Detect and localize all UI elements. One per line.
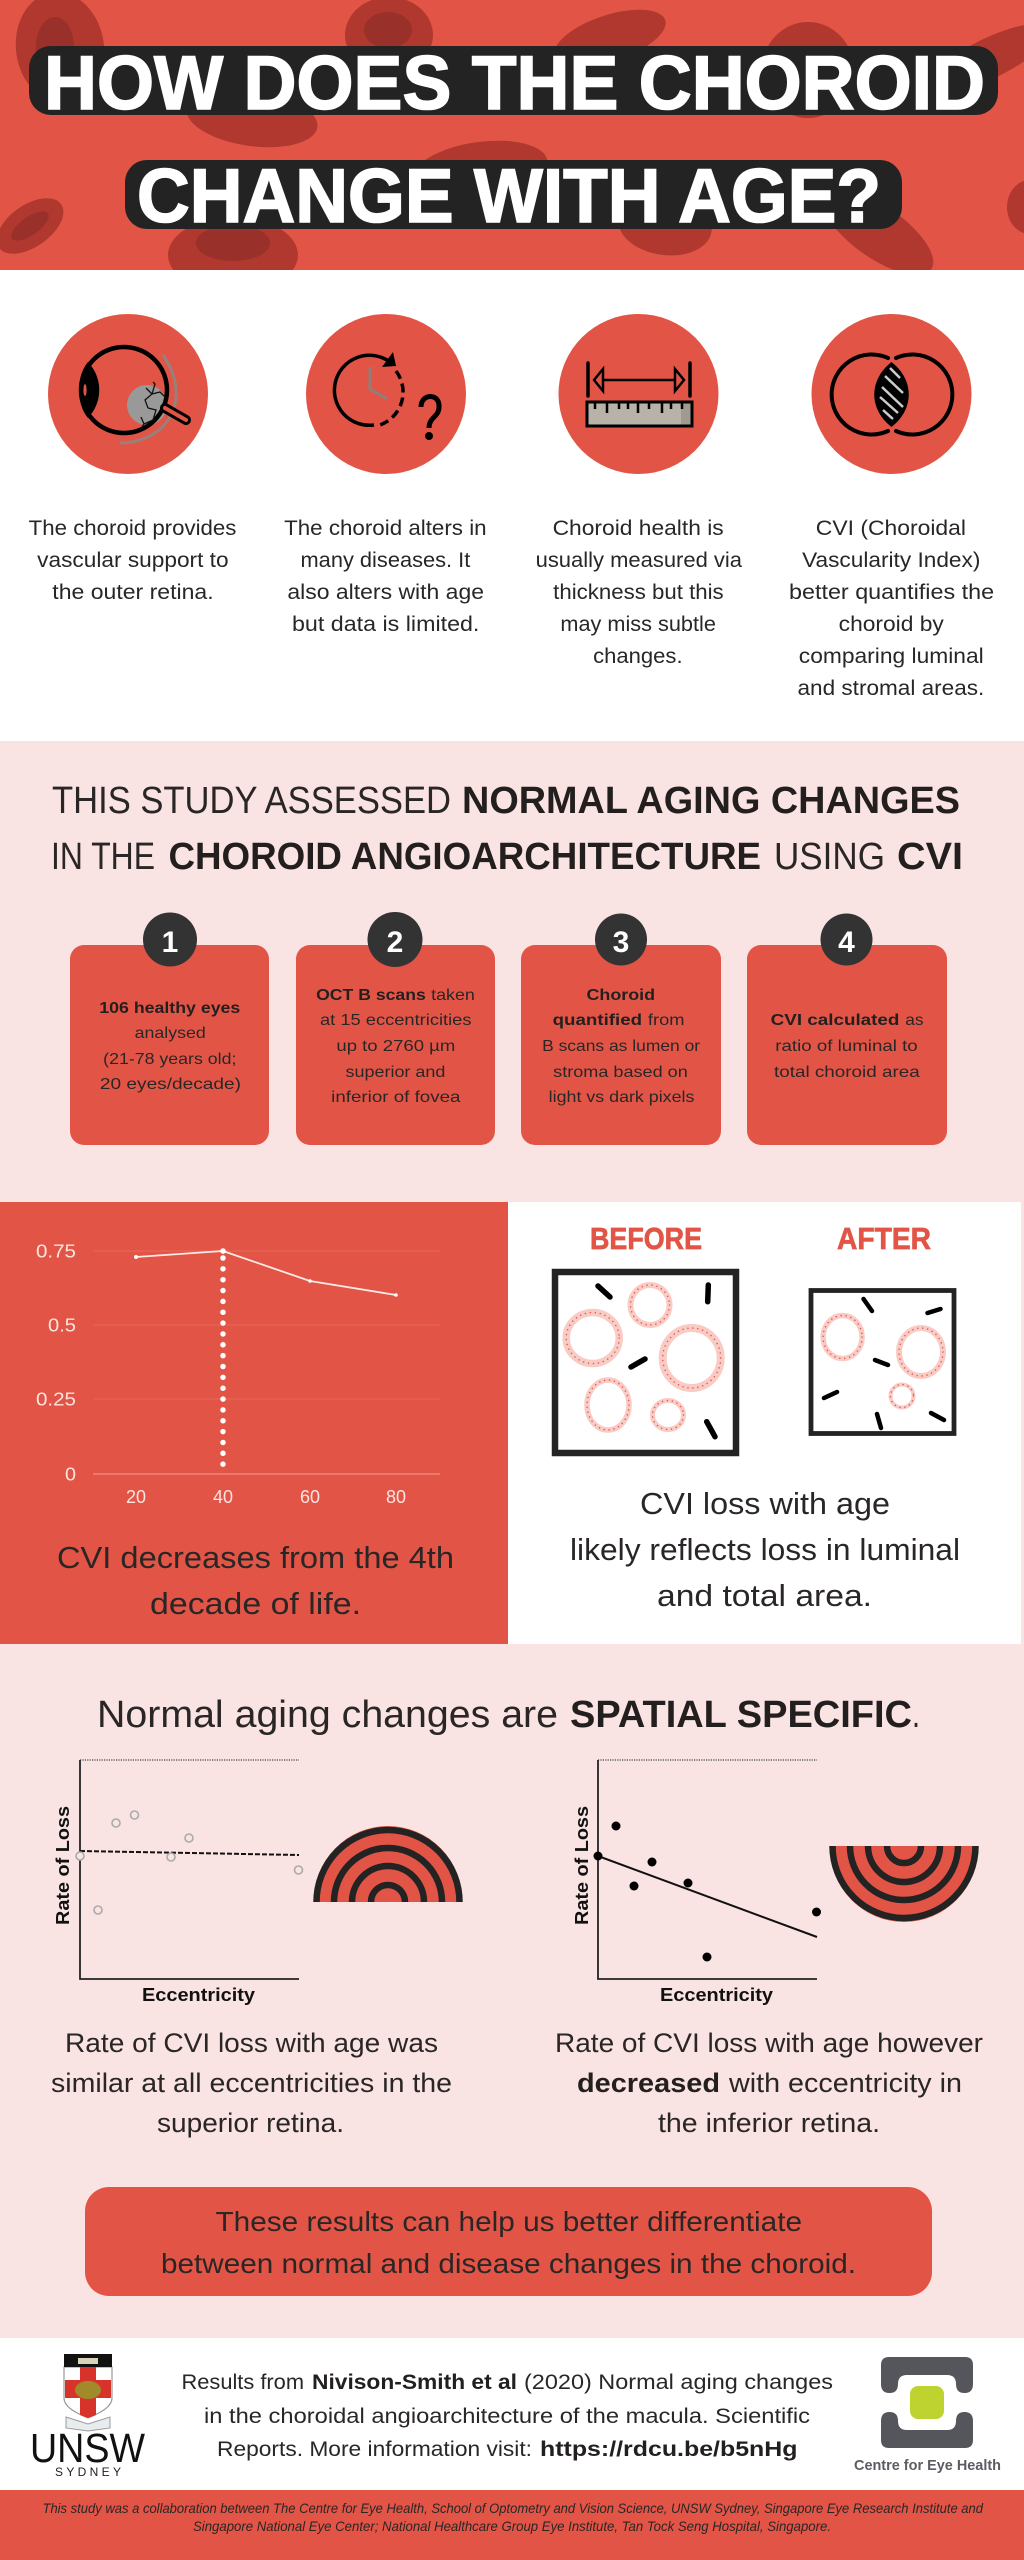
text: CVI loss reflects: and total area.	[657, 1578, 872, 1613]
text: citation: Nivison-Smith et al	[312, 2371, 517, 2394]
heading: study assessed: THIS STUDY ASSESSED	[52, 780, 451, 822]
text: inferior retina finding: decreased	[577, 2068, 720, 2098]
text: thickness measure: thickness but this	[553, 581, 724, 604]
text: thickness measure: changes.	[593, 645, 683, 668]
text: superior retina finding: similar at all eccentricities in the	[51, 2068, 452, 2098]
chart: superior retina scatter: Eccentricity	[142, 1985, 255, 2005]
title	[29, 41, 998, 239]
chart: superior retina scatter	[53, 1760, 302, 2005]
text: citation	[182, 2371, 833, 2461]
footer: collaboration note	[0, 2490, 1024, 2560]
panel: step 3: stroma based on	[553, 1064, 688, 1081]
panel: step 3: B scans as lumen or	[542, 1038, 701, 1055]
text: choroid provides support: the outer retina.	[52, 581, 214, 604]
line chart	[36, 1242, 440, 1507]
panel: background facts	[29, 314, 994, 700]
callout: conclusion: between normal and disease changes in the choroid.	[161, 2248, 856, 2279]
text: choroid provides support	[29, 517, 236, 604]
panel: step 2: OCT B scans	[316, 987, 426, 1004]
text: CVI definition: CVI (Choroidal	[816, 517, 966, 540]
panel: pink background for study and results	[0, 741, 1024, 2338]
text: CVI definition: and stromal areas.	[798, 677, 984, 700]
chart: inferior retina scatter: Rate of Loss	[572, 1806, 592, 1925]
heading: after: AFTER	[837, 1221, 931, 1256]
panel: step 4: 4	[838, 926, 855, 959]
panel: step 2: superior and	[346, 1064, 445, 1081]
panel: step 1: analysed	[135, 1025, 206, 1042]
chart: inferior retina scatter	[572, 1760, 821, 2005]
panel: CVI line chart	[0, 1202, 508, 1644]
panel: step 2	[296, 912, 495, 1145]
title: CHANGE WITH AGE?	[137, 154, 881, 239]
panel: step 3: 3	[613, 926, 629, 959]
line chart: 0.75	[36, 1242, 76, 1262]
heading: study assessed: NORMAL AGING CHANGES	[462, 780, 960, 822]
icon: upper semicircle rings	[314, 1826, 462, 1902]
panel: step 3: from	[648, 1012, 684, 1029]
panel: step 4: CVI calculated	[771, 1012, 899, 1029]
heading: spatial specific	[97, 1694, 920, 1736]
text: inferior retina finding: with eccentricity in	[728, 2068, 962, 2098]
chart: inferior retina scatter: Eccentricity	[660, 1985, 773, 2005]
text: thickness measure: may miss subtle	[560, 613, 716, 636]
icon: lower semicircle rings	[830, 1846, 978, 1922]
panel: step 4: total choroid area	[774, 1064, 920, 1081]
title: HOW DOES THE CHOROID	[44, 41, 985, 126]
text: citation: Reports. More information visit:	[217, 2438, 532, 2461]
text: CVI decreases: decade of life.	[150, 1586, 361, 1621]
logo: Centre for Eye Health	[854, 2357, 1001, 2474]
diagram: before vessels	[555, 1272, 736, 1453]
text: inferior retina finding: the inferior retina.	[658, 2108, 880, 2138]
text: citation: (2020) Normal aging changes	[524, 2371, 833, 2394]
text: choroid provides support: vascular support to	[37, 549, 229, 572]
line chart: 60	[300, 1487, 320, 1507]
icon: ruler	[558, 314, 718, 474]
text: inferior retina finding	[555, 2028, 983, 2138]
text: CVI definition: choroid by	[839, 613, 944, 636]
logo: UNSW Sydney: UNSW	[30, 2425, 145, 2471]
text: choroid alters	[284, 517, 487, 636]
diagram: after vessels	[811, 1290, 954, 1434]
chart: superior retina scatter: Rate of Loss	[53, 1806, 73, 1925]
line chart: 0.25	[36, 1390, 76, 1410]
panel: step 1: 20 eyes/decade)	[100, 1076, 241, 1093]
text: CVI decreases	[57, 1540, 454, 1621]
callout: conclusion	[85, 2187, 932, 2296]
text: CVI decreases: CVI decreases from the 4th	[57, 1540, 454, 1575]
heading: spatial specific: Normal aging changes are	[97, 1694, 558, 1736]
panel: step 1: 106 healthy eyes	[99, 1000, 240, 1017]
text: inferior retina finding: Rate of CVI loss with age however	[555, 2028, 983, 2058]
line chart: 80	[386, 1487, 406, 1507]
panel: step 4	[747, 914, 947, 1145]
text: CVI loss reflects: CVI loss with age	[640, 1486, 890, 1521]
panel: step 2: up to 2760 µm	[336, 1038, 455, 1055]
panel: step 3: Choroid	[586, 987, 655, 1004]
heading: study assessed: IN THE	[51, 836, 155, 878]
text: CVI loss reflects	[570, 1486, 960, 1613]
text: CVI definition: better quantifies the	[789, 581, 994, 604]
text: thickness measure: usually measured via	[536, 549, 742, 572]
heading: study assessed: CHOROID ANGIOARCHITECTURE	[168, 836, 761, 878]
text: citation: in the choroidal angioarchitecture of the macula. Scientific	[204, 2405, 810, 2428]
heading: study assessed	[51, 780, 963, 878]
logo: UNSW Sydney	[30, 2354, 145, 2479]
panel: step 2: taken	[431, 987, 475, 1004]
text: superior retina finding: superior retina.	[157, 2108, 344, 2138]
line chart: 40	[213, 1487, 233, 1507]
panel: step 2: 2	[387, 926, 403, 959]
text: superior retina finding	[51, 2028, 452, 2138]
heading: study assessed: CVI	[897, 836, 963, 878]
panel: step 4: as	[905, 1012, 924, 1029]
logo: UNSW Sydney: SYDNEY	[55, 2465, 121, 2479]
line chart: 0.5	[48, 1316, 76, 1336]
text: choroid provides support: The choroid provides	[29, 517, 236, 540]
panel: step 1: 1	[162, 926, 178, 959]
text: superior retina finding: Rate of CVI loss with age was	[65, 2028, 438, 2058]
line chart: 0	[65, 1464, 76, 1484]
panel: step 2: at 15 eccentricities	[320, 1012, 472, 1029]
text: CVI loss reflects: likely reflects loss in luminal	[570, 1532, 960, 1567]
text: CVI definition: Vascularity Index)	[802, 549, 980, 572]
heading: study assessed: USING	[774, 836, 885, 878]
heading: spatial specific: SPATIAL SPECIFIC	[570, 1694, 912, 1736]
header banner with blood cells	[0, 0, 1024, 293]
panel: step 3: light vs dark pixels	[549, 1089, 694, 1106]
text: CVI definition	[789, 517, 994, 700]
panel: before and after	[508, 1202, 1021, 1644]
text: choroid alters: The choroid alters in	[284, 517, 487, 540]
panel: step 1: (21-78 years old;	[103, 1051, 236, 1068]
text: thickness measure	[536, 517, 742, 668]
footer: collaboration note: Singapore National Eye Center; National Healthcare Group Eye Institute, Tan Tock Seng Hospital, Singapore.	[193, 2518, 831, 2534]
icon: overlapping circles	[812, 314, 972, 474]
panel: step 3: quantified	[553, 1012, 642, 1029]
panel: step 2: inferior of fovea	[331, 1089, 461, 1106]
text: CVI definition: comparing luminal	[799, 645, 984, 668]
icon: eye with choroid	[48, 314, 208, 474]
callout: conclusion: These results can help us better differentiate	[216, 2206, 802, 2237]
panel: step 3	[521, 914, 721, 1145]
text: citation: https://rdcu.be/b5nHg	[540, 2438, 798, 2461]
heading: before: BEFORE	[590, 1221, 702, 1256]
text: thickness measure: Choroid health is	[553, 517, 724, 540]
text: choroid alters: also alters with age	[287, 581, 484, 604]
line chart: 20	[126, 1487, 146, 1507]
text: choroid alters: many diseases. It	[300, 549, 470, 572]
text: citation: Results from	[182, 2371, 304, 2394]
icon: clock with question mark	[306, 314, 466, 474]
panel: step 4: ratio of luminal to	[775, 1038, 918, 1055]
text: choroid alters: but data is limited.	[292, 613, 479, 636]
logo: Centre for Eye Health: Centre for Eye Health	[854, 2457, 1001, 2474]
panel: step 1	[70, 912, 269, 1145]
heading: spatial specific: .	[912, 1694, 920, 1736]
